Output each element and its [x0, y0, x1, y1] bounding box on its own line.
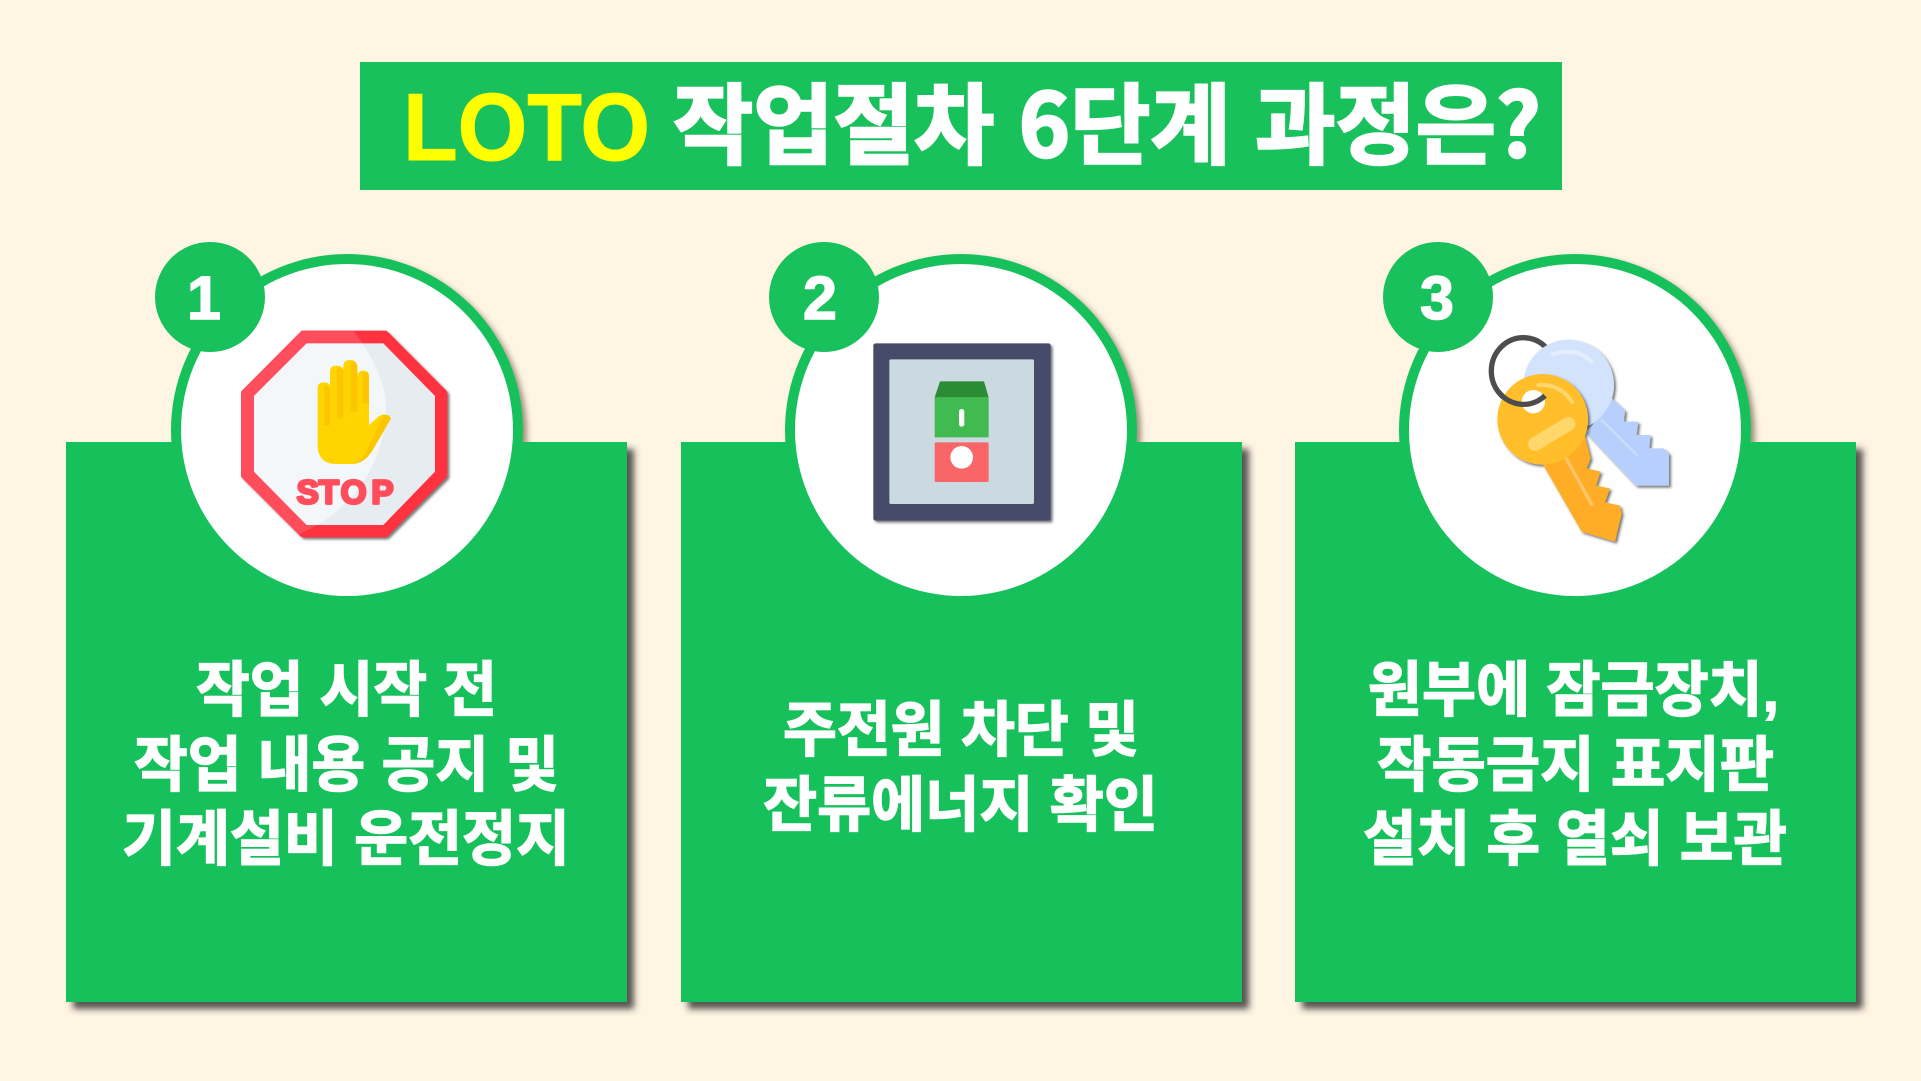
step 3 text: 설치 후 열쇠 보관 [1363, 806, 1787, 873]
number badge 3 [1383, 242, 1493, 352]
icon circle 1 [181, 264, 513, 596]
title: LOTO [403, 74, 650, 181]
panel: step 2 [681, 242, 1242, 1002]
icon: stop sign with hand [230, 320, 443, 540]
step 1 text: 작업 시작 전 [196, 657, 497, 724]
title: 작업절차 6단계 과정은? [673, 56, 1541, 183]
icon: power switch [873, 343, 1051, 521]
number badge 2: 2 [803, 264, 837, 332]
step 2 text: 주전원 차단 및 [783, 697, 1139, 764]
step 3 text [1363, 657, 1787, 873]
number badge 1 [155, 242, 265, 352]
step 3 text: 원부에 잠금장치, [1368, 657, 1779, 724]
outer ring 3 [1399, 254, 1751, 606]
icon: keys [1491, 338, 1669, 542]
number badge 1: 1 [187, 264, 221, 332]
step 2 text [763, 697, 1158, 839]
panel: step 3 [1295, 242, 1856, 1002]
icon: stop sign with hand: STOP [297, 475, 394, 512]
step 1 text: 작업 내용 공지 및 [134, 732, 559, 799]
step 2 text: 잔류에너지 확인 [763, 772, 1158, 839]
step 1 text: 기계설비 운전정지 [122, 806, 570, 873]
title [360, 56, 1562, 190]
outer ring 2 [785, 254, 1137, 606]
icon circle 2 [795, 264, 1127, 596]
step 1 text [122, 657, 570, 873]
number badge 3: 3 [1420, 264, 1454, 332]
step 3 text: 작동금지 표지판 [1377, 732, 1774, 799]
icon circle 3 [1409, 264, 1741, 596]
card background 1 [66, 442, 627, 1002]
card background 3 [1295, 442, 1856, 1002]
panel: step 1 [66, 242, 627, 1002]
outer ring 1 [171, 254, 523, 606]
number badge 2 [769, 242, 879, 352]
card background 2 [681, 442, 1242, 1002]
